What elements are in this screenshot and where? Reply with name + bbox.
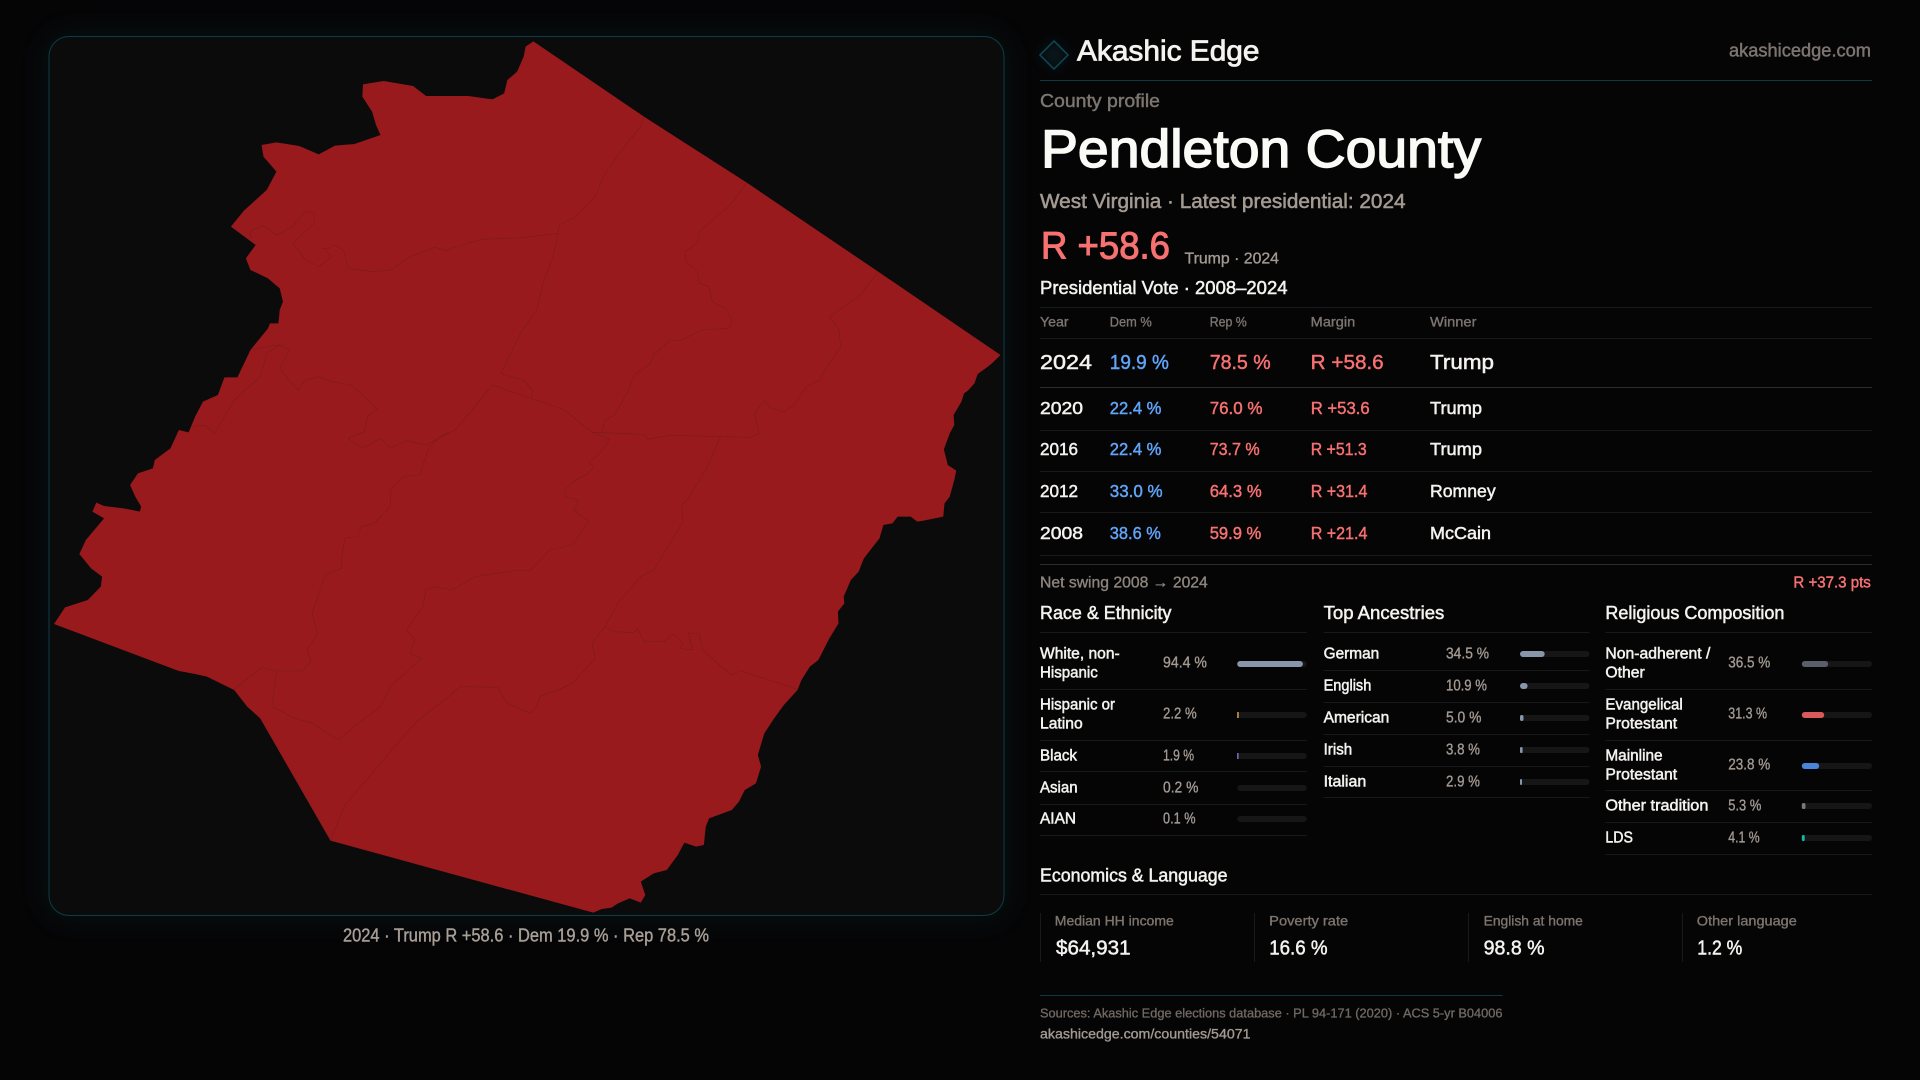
row: english: English (1324, 677, 1371, 694)
row 2012: 33.0 % (1110, 481, 1163, 501)
row 2020: Trump (1430, 398, 1482, 418)
row 2012 (1040, 481, 1496, 501)
row 2008: 59.9 % (1210, 523, 1261, 543)
row: non-adherent: Non-adherent / (1605, 645, 1711, 662)
row: hispanic: Latino (1040, 715, 1083, 732)
panel: county map (49, 36, 1004, 916)
row: white: 94.4 % (1163, 654, 1207, 671)
row 2016: 73.7 % (1210, 439, 1260, 459)
row 2012: 2012 (1040, 481, 1078, 501)
row 2008: R +21.4 (1311, 523, 1368, 543)
row: lds: LDS (1605, 830, 1633, 847)
row 2008: 38.6 % (1110, 523, 1161, 543)
panel: economics and language (1040, 866, 1872, 962)
row 2008: 2008 (1040, 523, 1083, 543)
row: american: 5.0 % (1446, 709, 1482, 726)
table header: Rep % (1210, 314, 1247, 330)
row: lds (1605, 830, 1872, 847)
row: evangelical: Evangelical (1605, 696, 1683, 713)
row: asian (1040, 780, 1307, 797)
row: american (1324, 709, 1590, 726)
row: evangelical (1605, 696, 1872, 732)
county outline (54, 41, 1000, 913)
row: hispanic: Hispanic or (1040, 696, 1115, 713)
row: irish: 3.8 % (1446, 741, 1480, 758)
table title: Presidential Vote · 2008–2024 (1040, 278, 1288, 298)
map caption: 2024 · Trump R +58.6 · Dem 19.9 % · Rep 78.5 % (343, 926, 709, 946)
stat: english at home (1468, 912, 1583, 962)
row 2008: McCain (1430, 523, 1491, 543)
row 2024 (1040, 351, 1494, 374)
stat: other language: 1.2 % (1697, 936, 1742, 960)
stat: poverty rate: Poverty rate (1269, 912, 1348, 928)
row 2024: 19.9 % (1110, 351, 1169, 374)
panel: race and ethnicity (1040, 603, 1307, 836)
row 2020: 2020 (1040, 398, 1083, 418)
stat: median income: $64,931 (1056, 936, 1131, 960)
row: english (1324, 677, 1590, 694)
row: german: 34.5 % (1446, 645, 1489, 662)
row: american: American (1324, 709, 1389, 726)
row: german: German (1324, 645, 1379, 662)
row 2024: 78.5 % (1210, 351, 1271, 374)
stat: english at home: 98.8 % (1484, 936, 1545, 960)
row: irish: Irish (1324, 741, 1352, 758)
stat: median income: Median HH income (1055, 912, 1174, 928)
row: other tradition (1605, 798, 1872, 815)
site url: akashicedge.com (1729, 40, 1871, 60)
county heading (1040, 91, 1482, 268)
row 2012: R +31.4 (1311, 481, 1368, 501)
row: black: 1.9 % (1163, 748, 1194, 765)
row: aian: AIAN (1040, 810, 1076, 827)
stat: other language: Other language (1697, 912, 1797, 928)
heading: Race & Ethnicity (1040, 603, 1172, 623)
row: lds: 4.1 % (1728, 830, 1760, 847)
footer sources: akashicedge.com/counties/54071 (1040, 1025, 1251, 1041)
row 2020 (1040, 398, 1482, 418)
stat: other language (1682, 912, 1797, 962)
net swing summary (1040, 564, 1872, 591)
row 2008 (1040, 523, 1491, 543)
row: asian: Asian (1040, 780, 1078, 797)
row: black: Black (1040, 748, 1077, 765)
row 2024: R +58.6 (1311, 351, 1384, 374)
title: Pendleton County (1041, 120, 1482, 179)
row: non-adherent: Other (1605, 664, 1645, 681)
row: aian: 0.1 % (1163, 810, 1196, 827)
brand header (1040, 36, 1872, 80)
row: italian (1324, 773, 1590, 790)
row: italian: Italian (1324, 773, 1366, 790)
row: mainline (1605, 748, 1872, 783)
row 2020: 22.4 % (1110, 398, 1161, 418)
county map with subdivisions (54, 41, 1000, 913)
row: italian: 2.9 % (1446, 773, 1480, 790)
table header: Winner (1430, 314, 1477, 330)
row: mainline: Protestant (1605, 766, 1678, 783)
row 2020: R +53.6 (1311, 398, 1370, 418)
footer sources: Sources: Akashic Edge elections database · PL 94-171 (2020) · ACS 5-yr B04006 (1040, 1007, 1503, 1021)
stat: poverty rate: 16.6 % (1269, 936, 1328, 960)
row: hispanic (1040, 696, 1307, 732)
row 2024: Trump (1430, 351, 1494, 374)
row: english: 10.9 % (1446, 677, 1487, 694)
heading: Religious Composition (1605, 603, 1784, 623)
row: black (1040, 748, 1307, 765)
row 2016: R +51.3 (1311, 439, 1367, 459)
panel: top ancestries (1324, 603, 1590, 798)
table header: Dem % (1110, 314, 1152, 330)
net swing summary: Net swing 2008 → 2024 (1040, 574, 1208, 591)
row: evangelical: Protestant (1605, 715, 1678, 732)
headline margin: R +58.6 (1041, 226, 1170, 268)
stat: english at home: English at home (1484, 912, 1583, 928)
subtitle: West Virginia · Latest presidential: 2024 (1040, 190, 1406, 213)
row 2016: 22.4 % (1110, 439, 1161, 459)
table header: Margin (1311, 314, 1355, 330)
row: evangelical: 31.3 % (1728, 705, 1767, 722)
row 2012: 64.3 % (1210, 481, 1262, 501)
row: non-adherent (1605, 645, 1872, 681)
row: white (1040, 645, 1307, 681)
row: german (1324, 645, 1590, 662)
panel: religious composition (1605, 603, 1872, 854)
row: non-adherent: 36.5 % (1728, 654, 1770, 671)
row 2020: 76.0 % (1210, 398, 1262, 418)
row: mainline: 23.8 % (1728, 756, 1770, 773)
stat: poverty rate (1254, 912, 1348, 962)
row 2016 (1040, 439, 1482, 459)
row 2012: Romney (1430, 481, 1496, 501)
table header (1040, 314, 1477, 330)
icon: diamond logo (1040, 41, 1068, 69)
row: white: White, non- (1040, 645, 1120, 662)
stat: median income (1040, 912, 1174, 962)
brand name: Akashic Edge (1077, 36, 1260, 68)
table header: Year (1040, 314, 1069, 330)
row 2016: Trump (1430, 439, 1482, 459)
row: mainline: Mainline (1605, 748, 1663, 765)
row 2016: 2016 (1040, 439, 1078, 459)
row: irish (1324, 741, 1590, 758)
row: other tradition: Other tradition (1605, 798, 1708, 815)
subdivision boundaries (192, 117, 878, 841)
row: hispanic: 2.2 % (1163, 705, 1197, 722)
headline margin note: Trump · 2024 (1184, 251, 1279, 268)
heading: Top Ancestries (1324, 603, 1444, 623)
net swing summary: R +37.3 pts (1793, 574, 1871, 591)
footer sources (1040, 996, 1503, 1041)
heading: Economics & Language (1040, 866, 1228, 886)
election results table (1040, 278, 1872, 556)
row: aian (1040, 810, 1307, 827)
row 2024: 2024 (1040, 351, 1092, 374)
row: white: Hispanic (1040, 664, 1098, 681)
row: other tradition: 5.3 % (1728, 798, 1761, 815)
row: asian: 0.2 % (1163, 780, 1199, 797)
eyebrow: County profile (1040, 91, 1160, 111)
